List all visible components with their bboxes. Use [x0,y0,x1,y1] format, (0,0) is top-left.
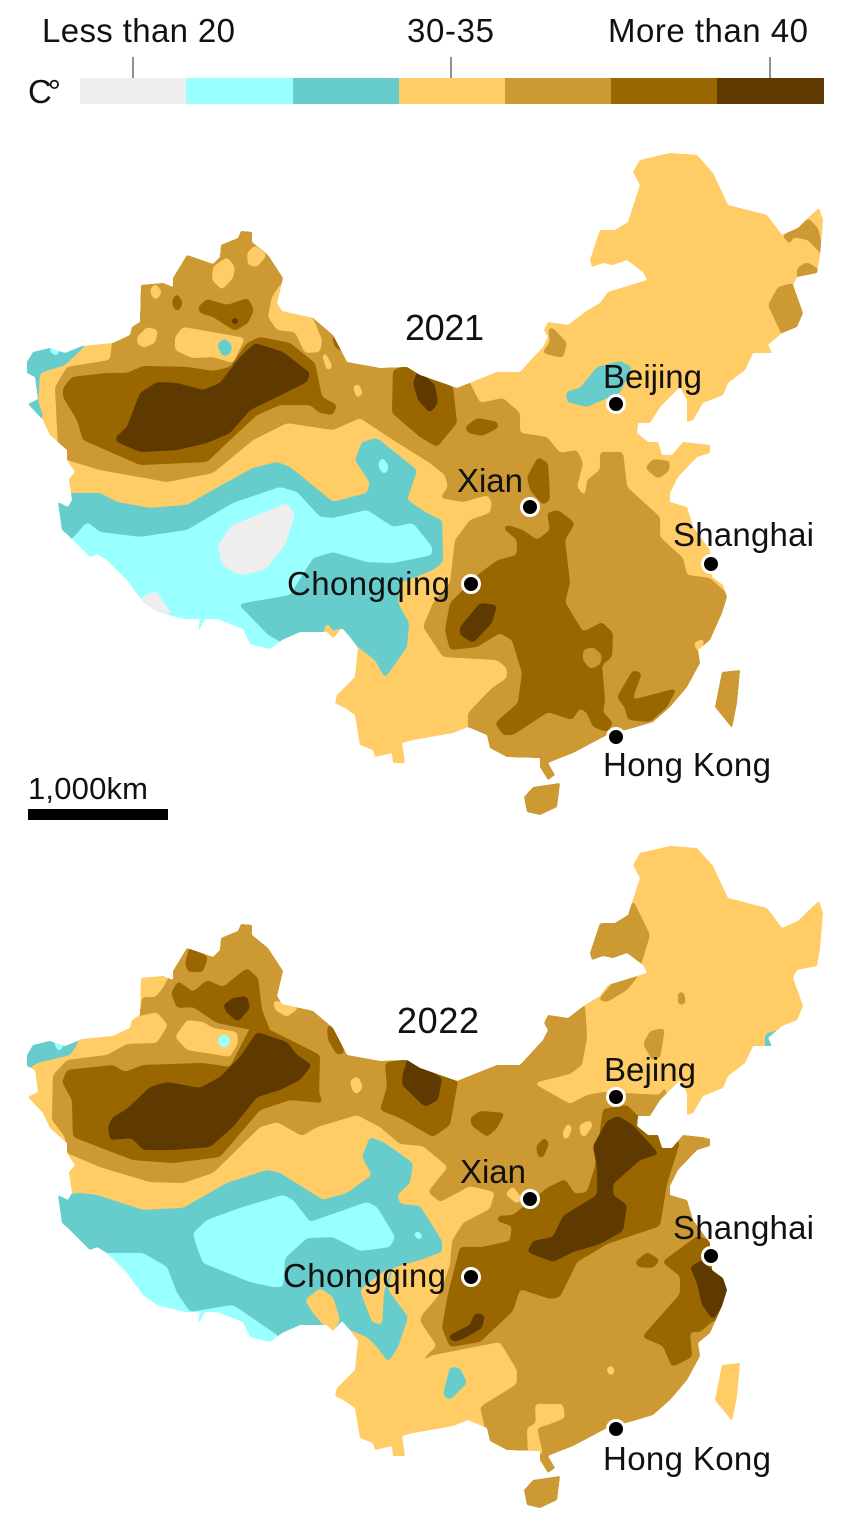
legend [28,12,824,110]
label: Xian 2021: Xian [457,462,523,499]
city dots 2021 [462,396,720,746]
legend label: more than 40: More than 40 [608,12,808,49]
heading: 2022: 2022 [397,1000,479,1041]
label: Hong Kong 2022: Hong Kong [603,1440,771,1477]
label: Hong Kong 2021: Hong Kong [603,746,771,783]
map: 2021 [27,153,823,815]
label: Chongqing 2022: Chongqing [283,1257,446,1294]
legend label: 30-35: 30-35 [407,12,494,49]
label: Chongqing 2021: Chongqing [287,565,450,602]
city dots 2022 [462,1088,720,1438]
label: Xian 2022: Xian [460,1153,526,1190]
heading: 2021: 2021 [405,307,484,348]
legend label: less than 20: Less than 20 [42,12,235,49]
scale line [28,809,168,820]
map: 2022 [27,846,823,1508]
legend unit: C° [28,73,61,110]
scale label: 1,000km [28,771,148,806]
label: Beijing 2022: Bejing [604,1051,696,1088]
label: Beijing 2021: Beijing [603,358,702,395]
label: Shanghai 2021: Shanghai [673,516,814,553]
legend colour scale [80,57,824,104]
scale bar [28,771,168,820]
label: Shanghai 2022: Shanghai [673,1209,814,1246]
